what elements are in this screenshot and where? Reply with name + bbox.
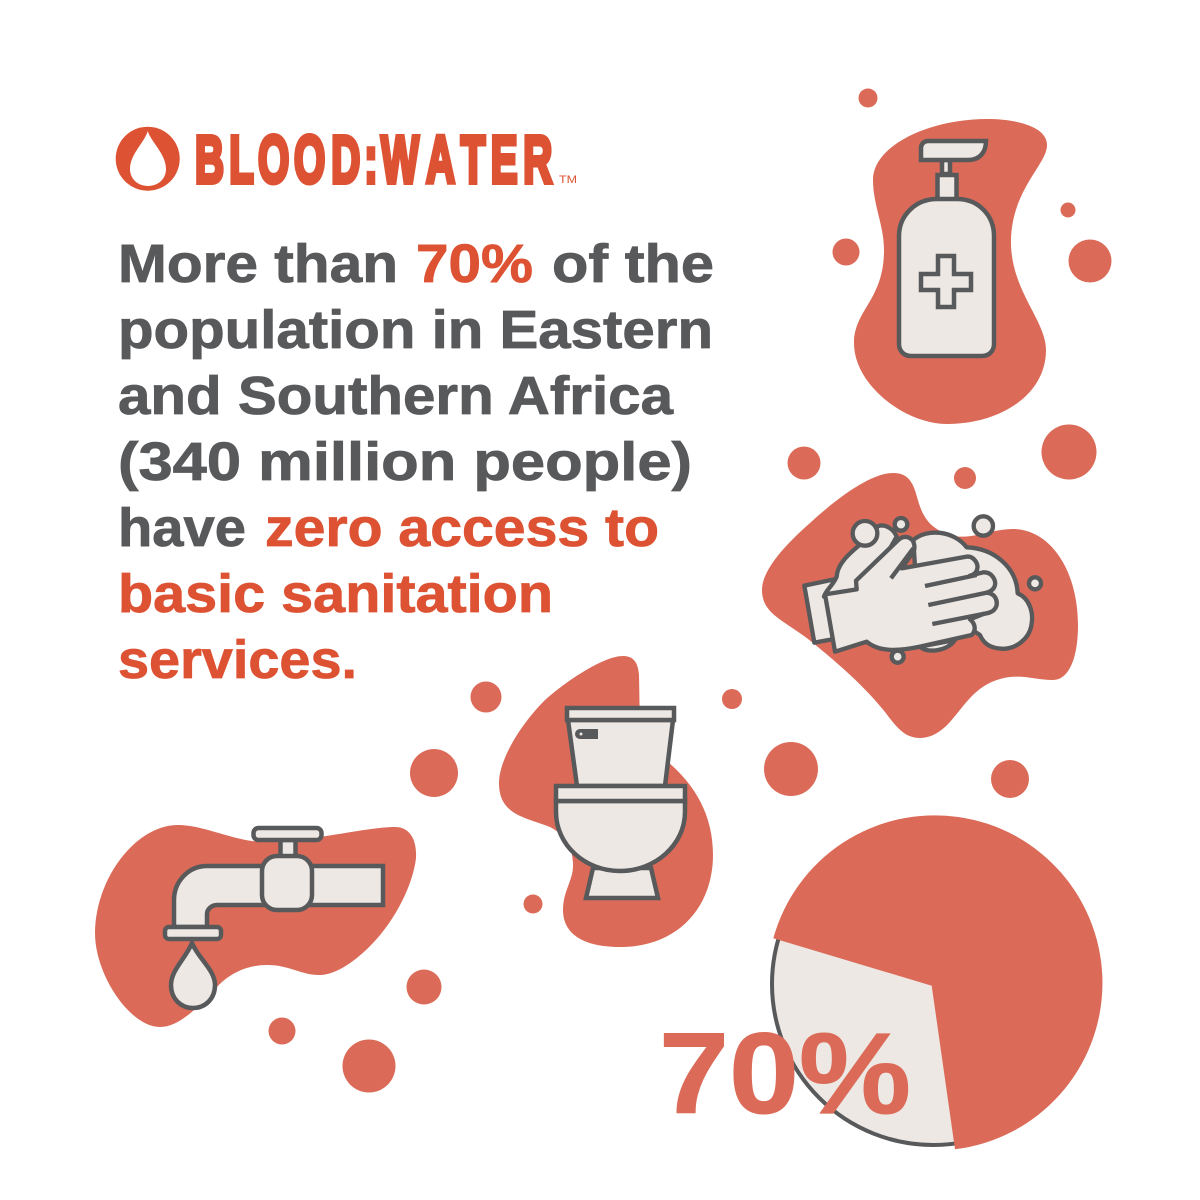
headline text block: zero access to	[265, 498, 659, 558]
panel: toilet	[499, 656, 713, 947]
headline text block	[118, 234, 714, 690]
headline text block: 70%	[416, 234, 533, 294]
headline text block: (340 million people)	[118, 432, 692, 492]
panel: soap bottle	[854, 119, 1047, 424]
icon: soapy hands	[804, 516, 1041, 663]
pie chart: 70%	[772, 815, 1102, 1149]
headline text block: More than	[118, 234, 398, 294]
icon: faucet and drop	[165, 828, 383, 1008]
icon: soap bottle	[899, 141, 994, 356]
blob behind toilet	[499, 656, 713, 947]
decorative dots	[268, 88, 1112, 1092]
logo: Blood:Water	[116, 122, 577, 197]
headline text block: population in Eastern	[118, 300, 713, 360]
blob behind bottle	[854, 119, 1047, 424]
headline text block: of the	[552, 234, 714, 294]
remaining 30% slice	[772, 823, 1094, 1145]
headline text block: have	[118, 498, 246, 558]
pie label: 70%: 70%	[659, 1010, 911, 1138]
icon: toilet	[556, 708, 685, 898]
trademark: TM	[559, 174, 577, 186]
blob behind faucet	[95, 825, 416, 1027]
headline text block: basic sanitation	[118, 564, 553, 624]
panel: hand washing	[762, 473, 1078, 738]
panel: faucet	[95, 825, 416, 1027]
logo wordmark: BLOOD:WATER	[195, 122, 552, 197]
70% slice	[773, 815, 1102, 1149]
headline text block: services.	[118, 630, 357, 690]
blob behind hands	[762, 473, 1078, 738]
icon: logo drop in circle	[116, 127, 180, 191]
headline text block: and Southern Africa	[118, 366, 674, 426]
